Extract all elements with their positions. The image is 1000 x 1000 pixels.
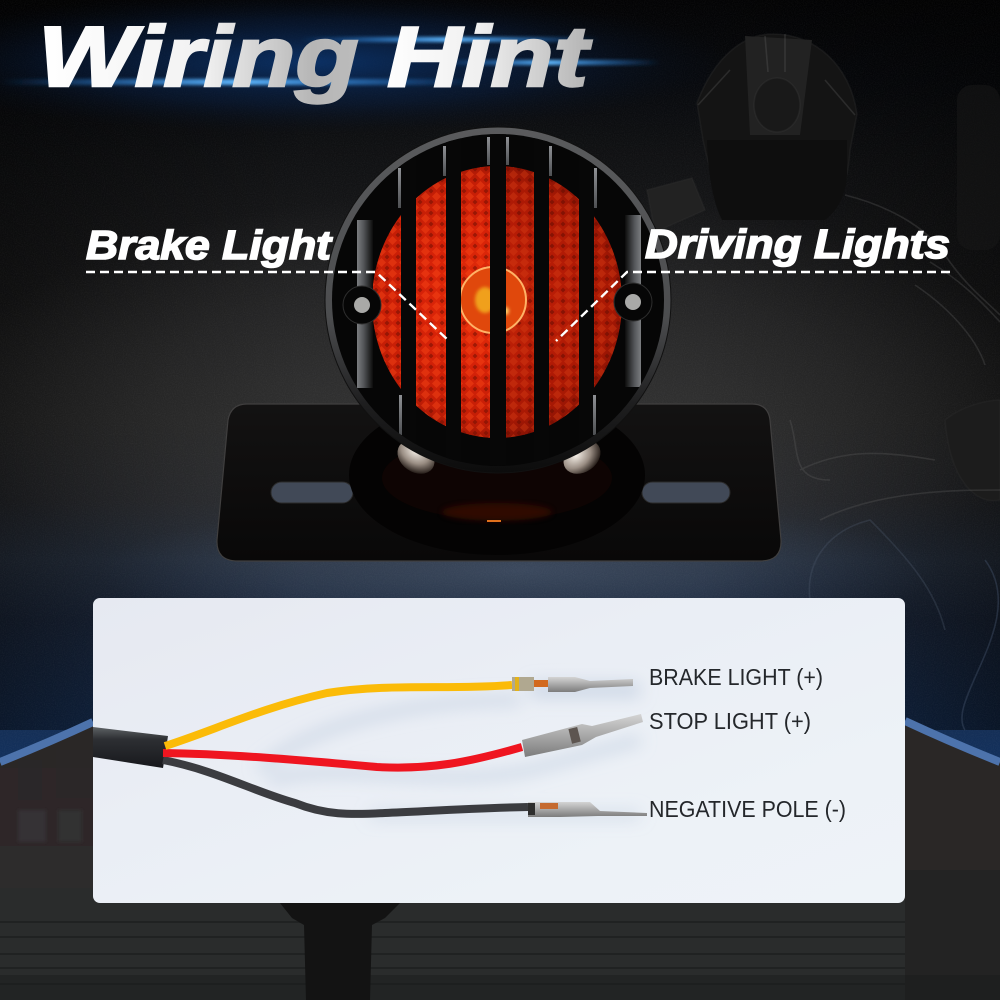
terminal: brake: [512, 677, 633, 692]
label: Brake Light: Brake Light: [86, 222, 334, 268]
grille bars: [357, 134, 641, 438]
lamp mount base: [349, 395, 645, 555]
left slot: [271, 482, 353, 503]
label: Driving Lights: Driving Lights: [645, 221, 950, 267]
lens center glow: [460, 267, 526, 333]
right mounting screw: [614, 283, 652, 321]
label: Driving Lights: [556, 221, 950, 341]
panel: wire photo: [93, 598, 905, 903]
label: Brake Light: [86, 222, 449, 341]
background: faded motorcycle rider: [647, 34, 1000, 730]
left mounting screw: [343, 286, 381, 324]
wire shadows: [260, 690, 640, 815]
red lens: [370, 164, 626, 440]
background: lower street scene with blue arc: [0, 640, 1000, 1000]
tail light lamp: [324, 128, 672, 474]
cable jacket: [93, 727, 168, 768]
yellow wire: [165, 685, 512, 746]
title: Wiring Hint: [0, 0, 730, 134]
wire label: brake light: BRAKE LIGHT (+): [649, 664, 823, 690]
lamp housing rim: [325, 127, 671, 473]
title: Wiring Hint: Wiring Hint: [38, 10, 592, 105]
license plate bracket: [217, 404, 781, 561]
wire label: negative pole: NEGATIVE POLE (-): [649, 796, 846, 822]
right slot: [642, 482, 730, 503]
black wire: [163, 760, 528, 814]
lamp interior: [332, 134, 664, 466]
wire label: stop light: STOP LIGHT (+): [649, 708, 811, 734]
terminal: stop: [522, 714, 643, 757]
terminal: negative: [528, 802, 647, 817]
red wire: [163, 747, 522, 768]
